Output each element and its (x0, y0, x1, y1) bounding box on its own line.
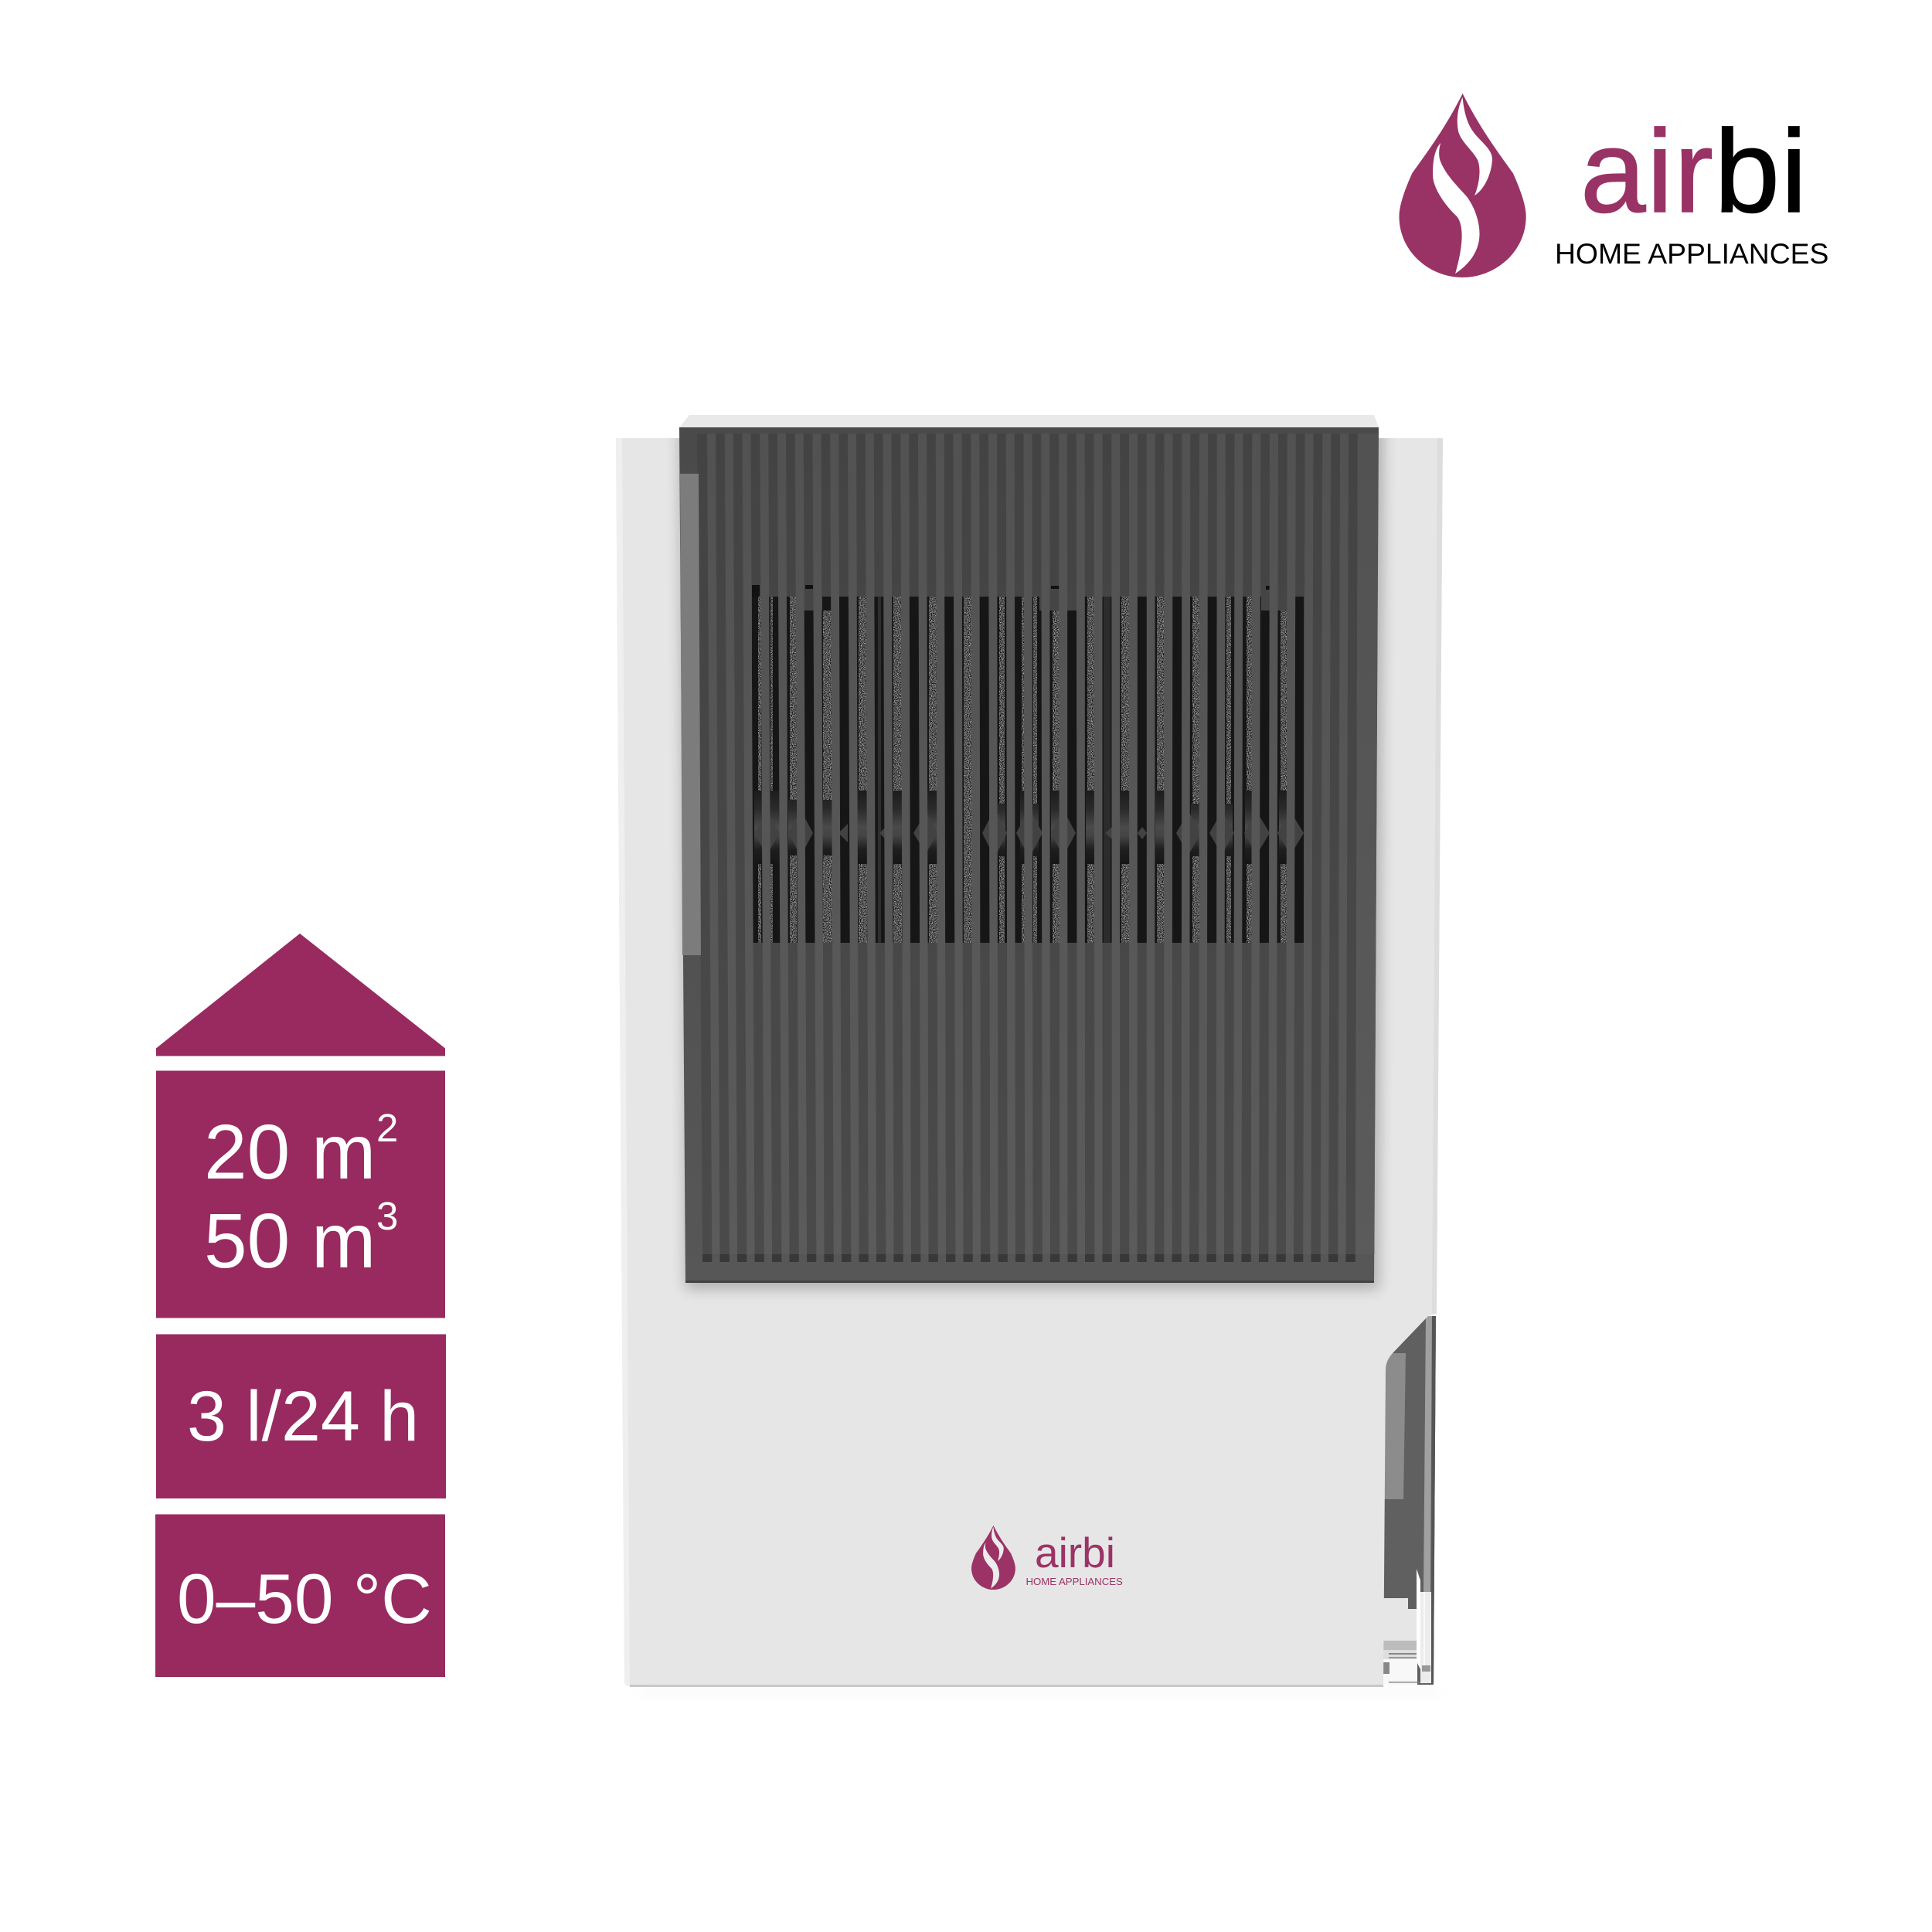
infographic canvas (155, 94, 1828, 1687)
brand tagline: HOME APPLIANCES (1555, 237, 1828, 270)
product: dehumidifier (616, 415, 1443, 1692)
spec: operating temperature (155, 1515, 445, 1677)
front grille panel (679, 427, 1379, 1283)
grille slot ends (702, 1254, 1355, 1262)
logo: airbi home appliances (1399, 94, 1828, 277)
fan band diamonds (755, 808, 1304, 858)
housing brand name: airbi (1035, 1529, 1115, 1577)
top edge of cover (679, 415, 1379, 427)
spec: operating temperature: 0–50 °C (177, 1560, 432, 1638)
icon: small flame drop (971, 1526, 1015, 1590)
logo on housing (971, 1526, 1123, 1590)
brand name: airbi (1580, 106, 1808, 237)
spec: room size: 20 m (204, 1109, 376, 1196)
spec: room size: 3 (376, 1194, 398, 1238)
grille slots (697, 434, 1358, 1254)
icon: flame water drop (1399, 94, 1526, 277)
housing tagline: HOME APPLIANCES (1026, 1576, 1123, 1587)
spec: room size (156, 1071, 445, 1318)
filter foam strips (758, 597, 1288, 943)
housing body (616, 427, 1443, 1687)
roof (156, 934, 445, 1056)
spec: room size: 50 m (204, 1198, 376, 1284)
spec: dehumidifying capacity: 3 l/24 h (187, 1377, 419, 1456)
panel bottom edge (685, 1281, 1374, 1283)
panel base (679, 427, 1379, 1282)
grille louvers (707, 434, 1379, 1254)
water tank side window (1379, 1316, 1436, 1685)
spec: dehumidifying capacity (156, 1334, 446, 1498)
air intake window (752, 585, 1304, 943)
fan band blades (754, 791, 1290, 864)
spec panel: house shaped stack (155, 934, 446, 1677)
spec: room size: 2 (376, 1106, 398, 1150)
ground shadow (641, 1688, 1437, 1692)
side handle strip (680, 474, 701, 955)
